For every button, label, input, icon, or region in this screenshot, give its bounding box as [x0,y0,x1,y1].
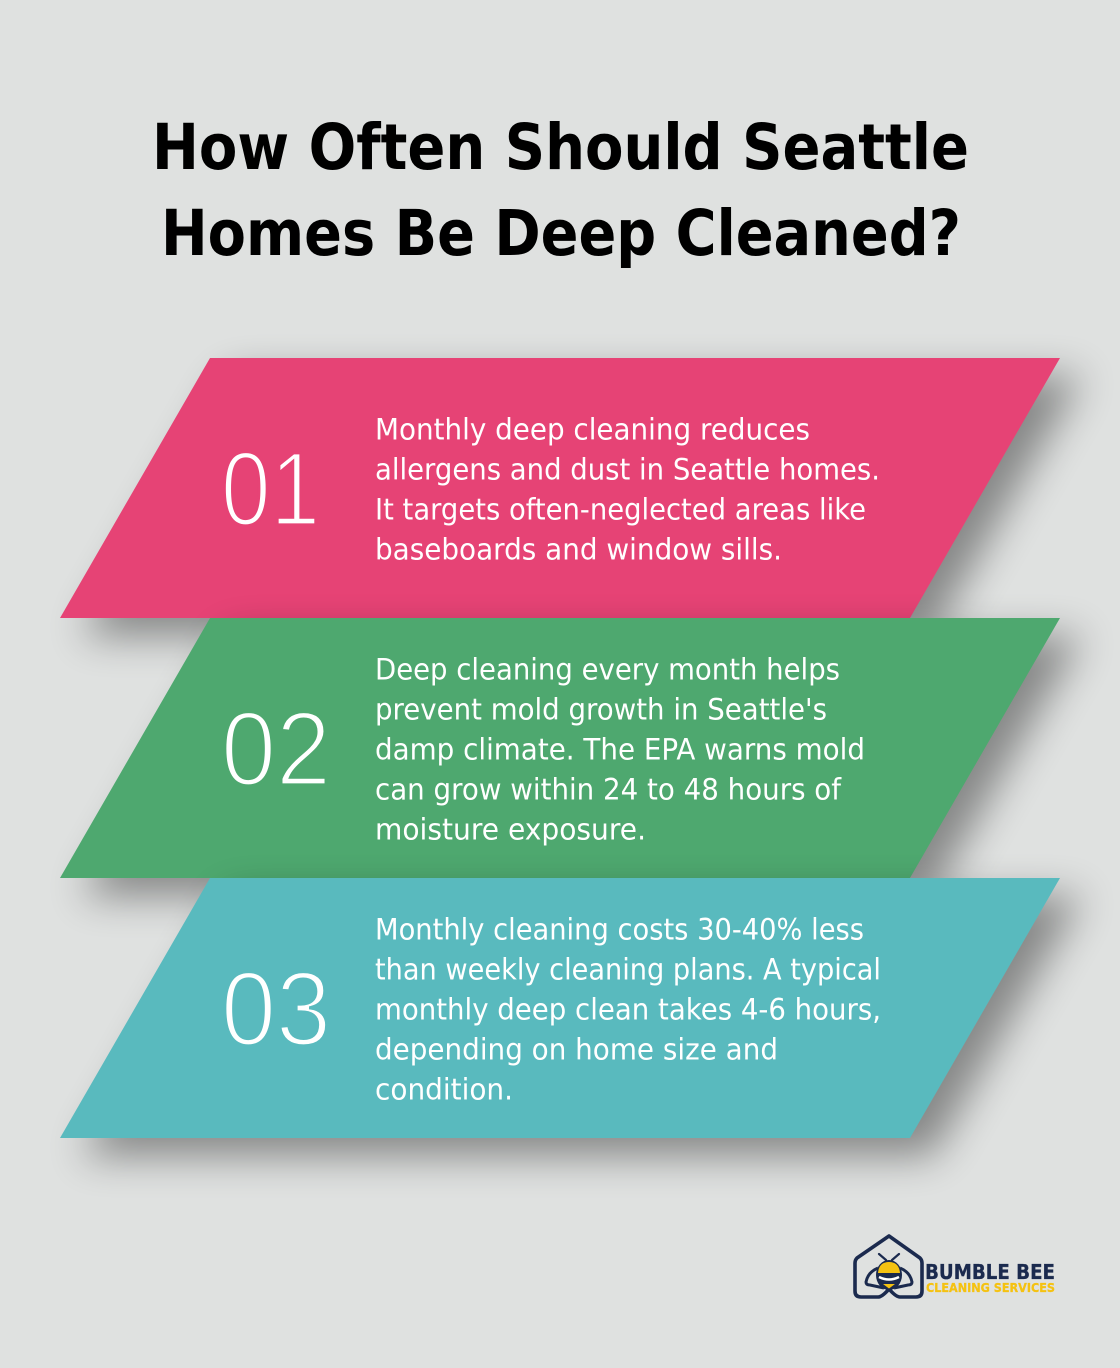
panel: step 03 [60,878,1060,1138]
text: step 03 body: condition. [375,1072,513,1106]
logo: Bumble Bee Cleaning Services [855,1236,1055,1297]
text: step 02 body: prevent mold growth in Seattle's [375,692,827,726]
panel: step 01 [60,358,1060,618]
number 02: 02 [221,691,331,808]
green parallelogram [60,618,1060,878]
text: step 01 body: Monthly deep cleaning reduces [375,412,810,446]
number 01: 01 [221,431,320,548]
teal parallelogram [60,878,1060,1138]
logo tagline: CLEANING SERVICES [926,1281,1055,1295]
text: step 03 body [375,912,881,1106]
text: step 02 body: damp climate. The EPA warns mold [375,732,865,766]
text: step 03 body: depending on home size and [375,1032,778,1066]
text: step 02 body: can grow within 24 to 48 hours of [375,772,842,806]
panel: step 02 [60,618,1060,878]
text: step 02 body: moisture exposure. [375,812,646,846]
icon: house with bee [855,1236,922,1297]
pink parallelogram [60,358,1060,618]
number 03: 03 [221,951,331,1068]
text: step 01 body [375,412,880,566]
text: step 01 body: It targets often-neglected areas like [375,492,866,526]
text: step 03 body: than weekly cleaning plans. A typical [375,952,881,986]
text: step 02 body: Deep cleaning every month helps [375,652,840,686]
text: step 01 body: baseboards and window sills. [375,532,782,566]
text: step 01 body: allergens and dust in Seattle homes. [375,452,880,486]
text: step 02 body [375,652,865,846]
title [152,111,969,270]
text: step 03 body: Monthly cleaning costs 30-40% less [375,912,864,946]
title: How Often Should Seattle [152,111,969,184]
text: step 03 body: monthly deep clean takes 4-6 hours, [375,992,881,1026]
title: Homes Be Deep Cleaned? [161,197,961,270]
logo wordmark: BUMBLE BEE [925,1260,1055,1284]
